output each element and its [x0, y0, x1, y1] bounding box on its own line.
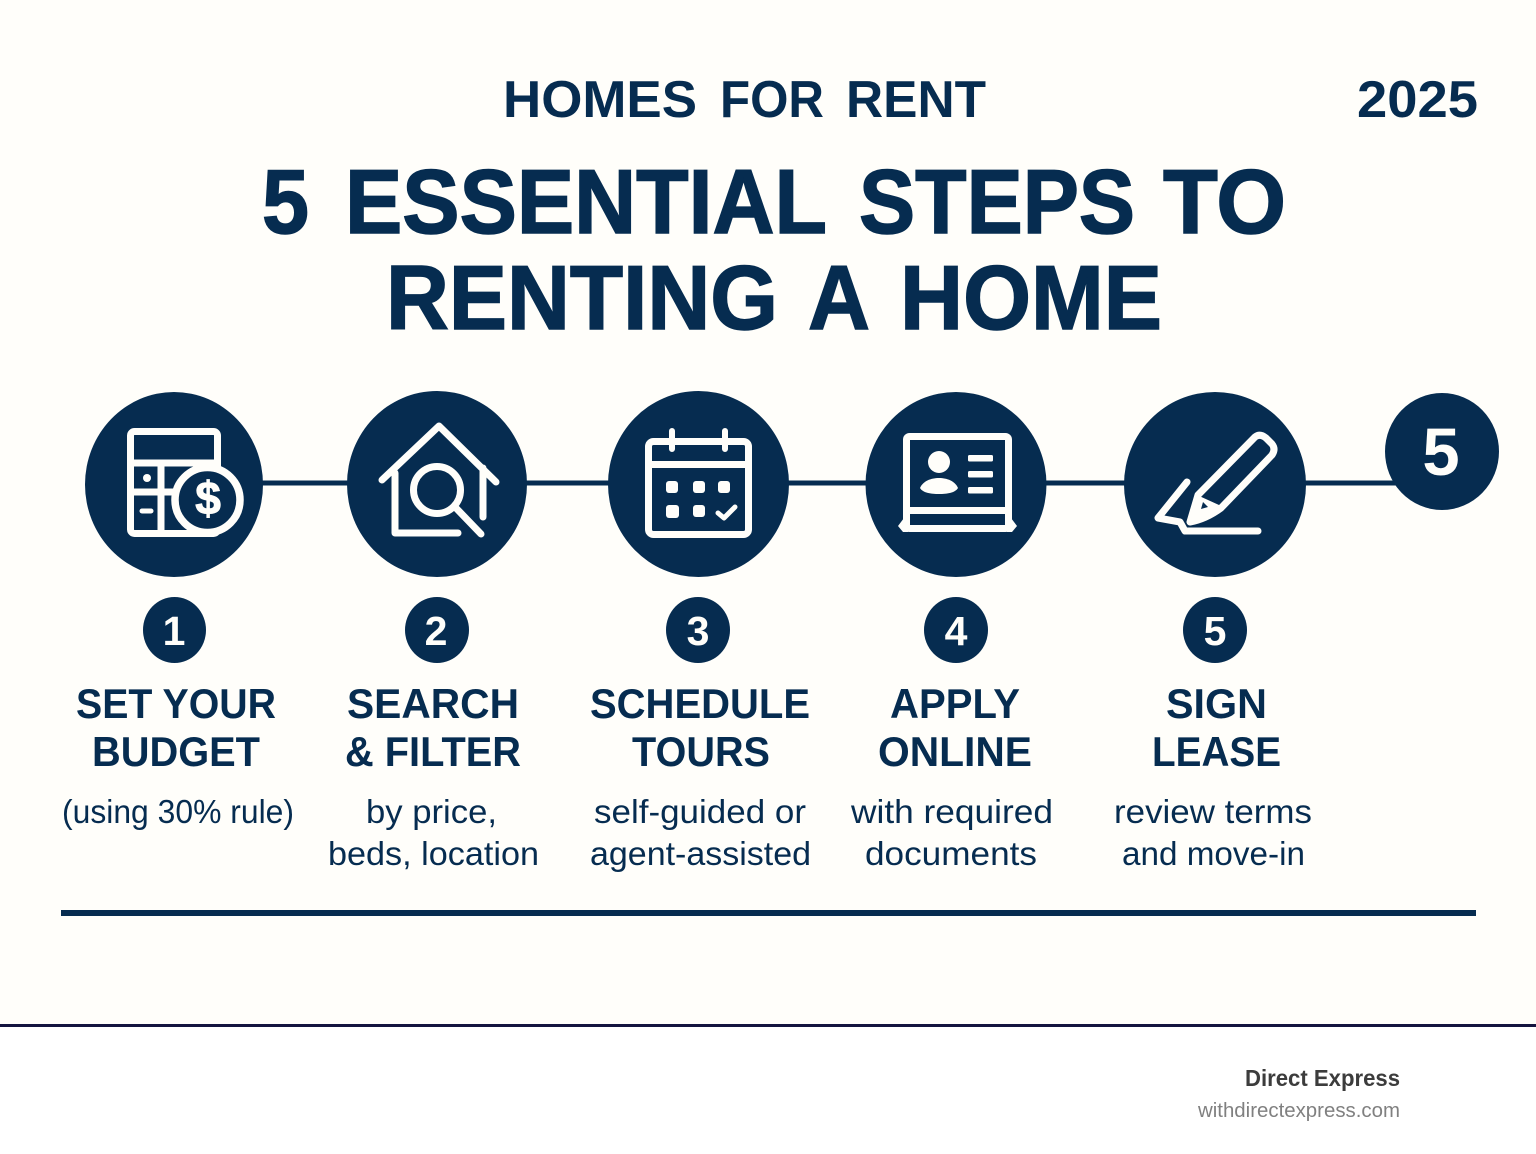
step 1 icon: calculator with dollar coin [85, 392, 263, 577]
title [262, 152, 1286, 349]
title: STEPS [859, 152, 1135, 253]
step 2 text: SEARCH [347, 680, 519, 727]
step 1 text: (using 30% rule) [62, 793, 294, 830]
step 3 text: self-guided or [594, 793, 806, 830]
step 5 text: SIGN [1166, 680, 1267, 727]
step 1 text: BUDGET [92, 728, 260, 775]
footer website: withdirectexpress.com [1197, 1099, 1400, 1122]
step 3 text: agent-assisted [590, 835, 811, 872]
step 3 icon: calendar [608, 391, 789, 577]
subtitle: RENT [846, 71, 986, 129]
subtitle: FOR [720, 71, 824, 129]
subtitle [503, 71, 986, 129]
step 4 text: APPLY [890, 680, 1020, 727]
step 5 text: 5 [1204, 608, 1226, 654]
step 2 icon: house with magnifying glass [347, 391, 527, 577]
subtitle: HOMES [503, 71, 697, 129]
timeline connector [255, 480, 1405, 486]
end marker: large number 5: 5 [1422, 415, 1460, 490]
step 1 text: SET YOUR [76, 680, 276, 727]
step 2 text: & FILTER [345, 728, 521, 775]
step 5 text [1114, 597, 1312, 872]
title: 5 [262, 152, 309, 253]
step 1 text [62, 597, 294, 830]
step 3 text: TOURS [632, 728, 770, 775]
step 1 text: 1 [163, 608, 185, 654]
step 3 text: SCHEDULE [590, 680, 810, 727]
title: TO [1163, 152, 1286, 253]
step 3 text [590, 597, 811, 872]
step 4 text: with required [850, 793, 1053, 830]
step 2 text: beds, location [328, 835, 539, 872]
bottom rule [61, 910, 1476, 916]
step 4 icon: laptop with applicant profile [866, 392, 1046, 577]
step 5 text: and move-in [1122, 835, 1305, 872]
title: ESSENTIAL [345, 152, 827, 253]
step 5 text: review terms [1114, 793, 1312, 830]
step 4 text [850, 597, 1053, 872]
step 2 text [328, 597, 539, 872]
year: 2025 [1357, 71, 1478, 129]
end marker: large number 5 [1385, 393, 1499, 510]
step 4 text: 4 [945, 608, 968, 654]
step 4 text: documents [865, 835, 1037, 872]
title: RENTING [386, 248, 778, 349]
step 2 text: by price, [366, 793, 497, 830]
step 5 icon: pen signing line [1124, 392, 1306, 577]
step 1 icon: calculator with dollar coin: $ [195, 472, 221, 524]
footer brand: Direct Express [1245, 1065, 1400, 1091]
step 3 text: 3 [687, 608, 709, 654]
step 5 text: LEASE [1152, 728, 1281, 775]
title: A [808, 248, 870, 349]
title: HOME [900, 248, 1162, 349]
step 4 text: ONLINE [878, 728, 1032, 775]
step 2 text: 2 [425, 608, 447, 654]
footer panel [0, 1024, 1536, 1154]
